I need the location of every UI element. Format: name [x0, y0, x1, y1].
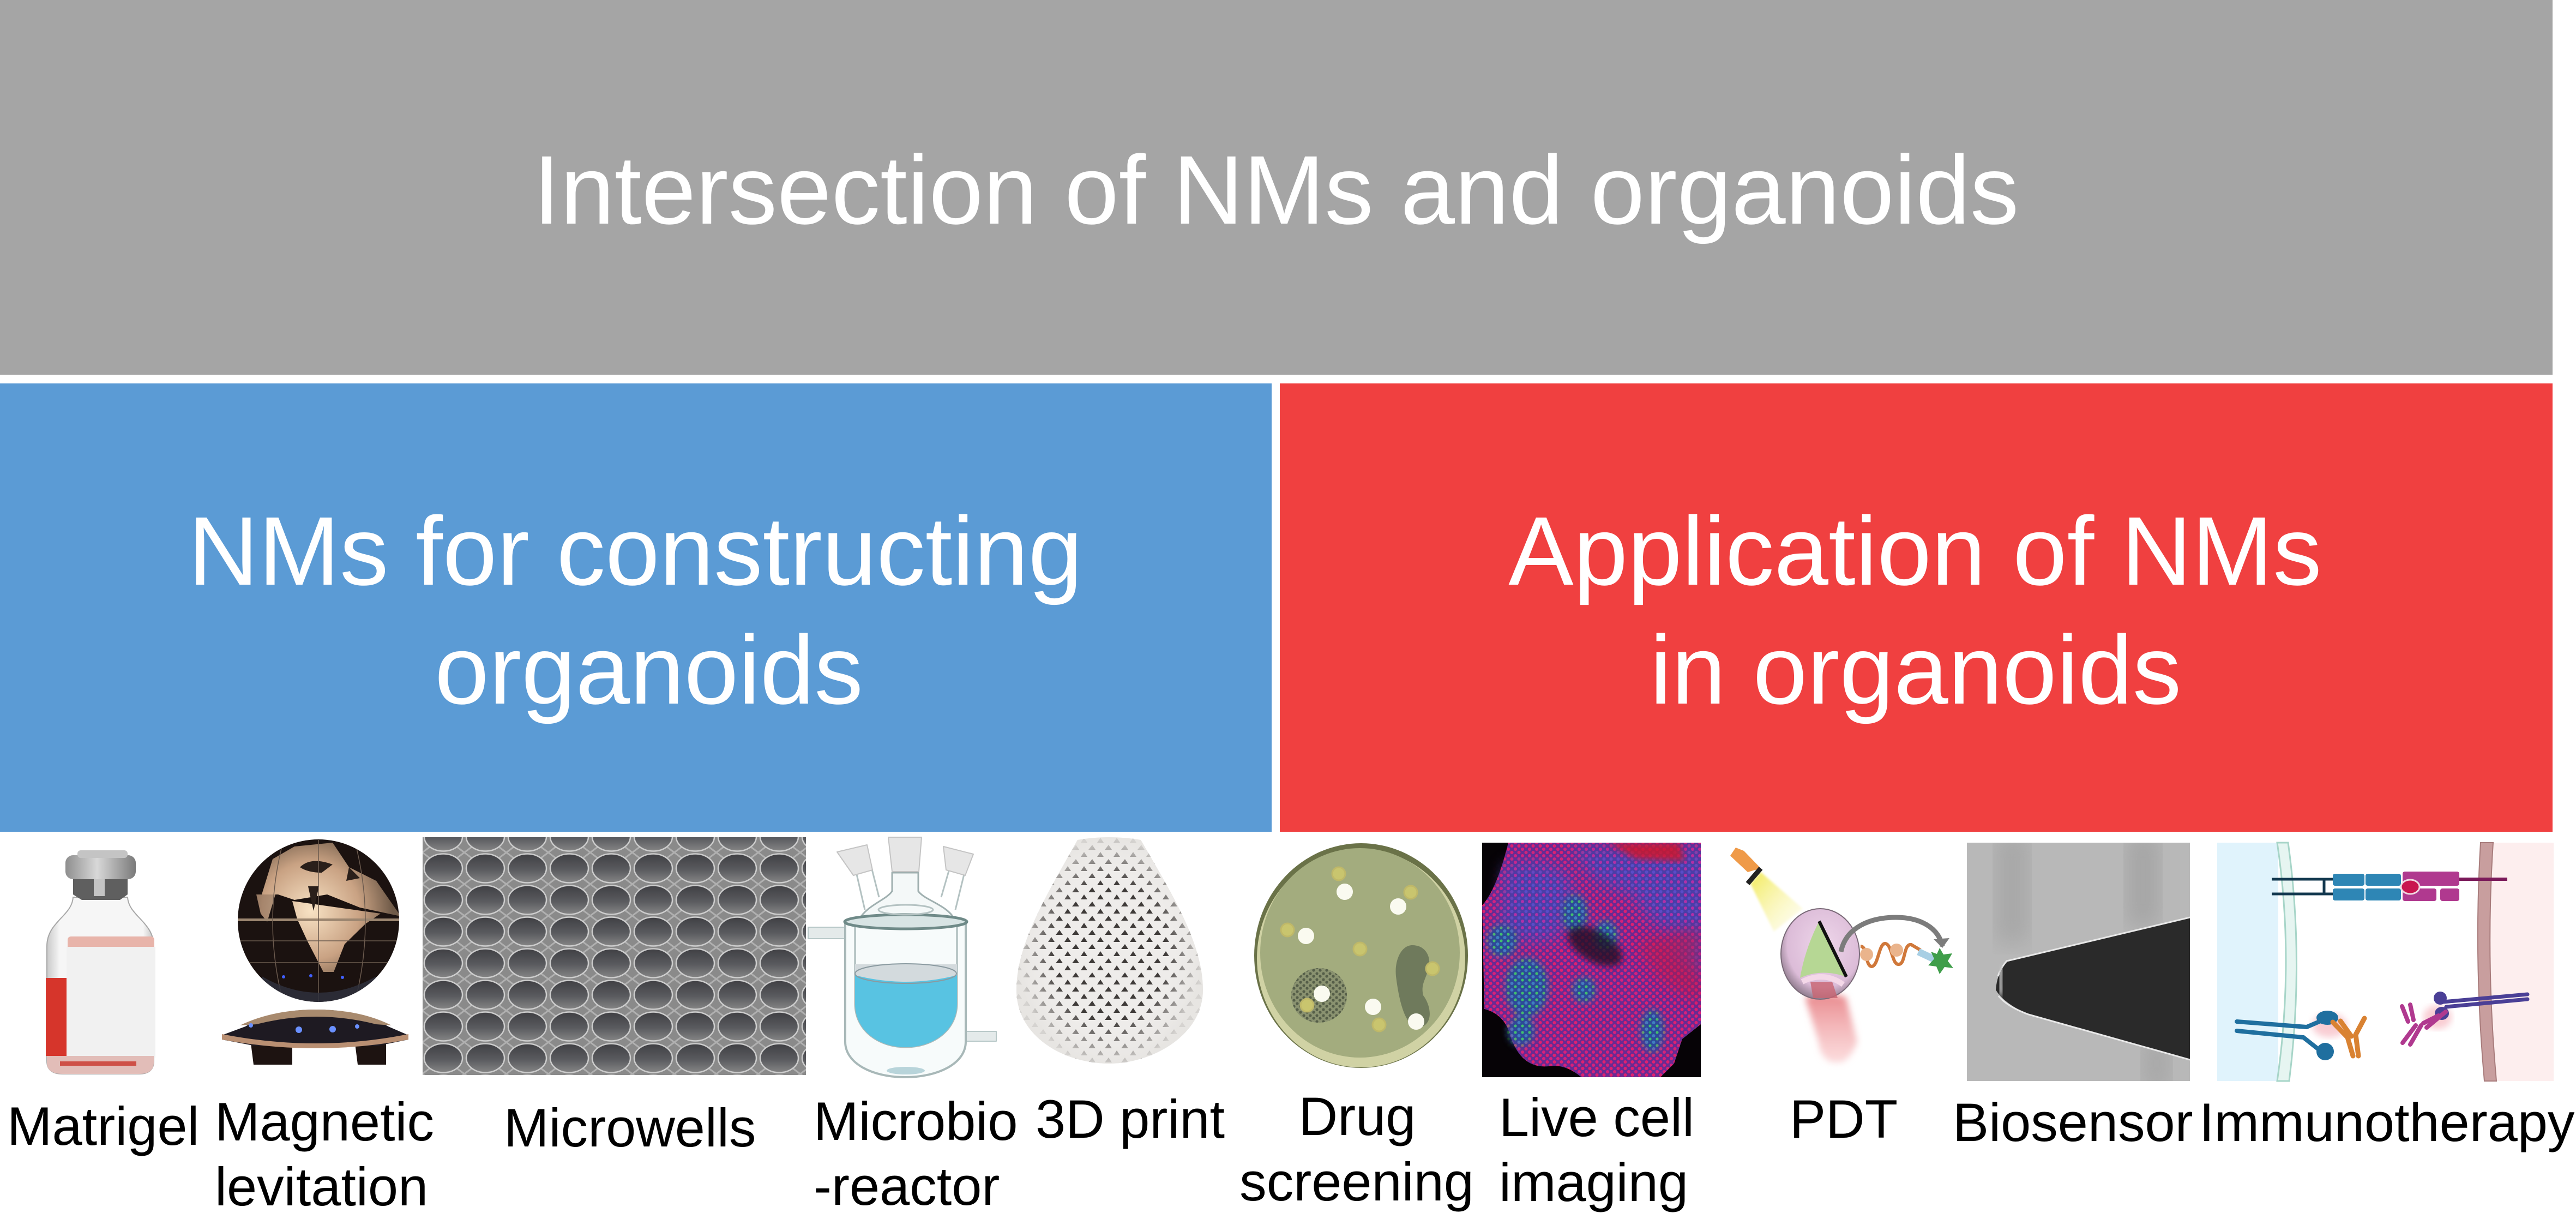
label: Microwells: Microwells	[504, 1098, 756, 1158]
molecule: T-cell receptor and MHC complex	[2272, 872, 2507, 901]
molecule: PD-L1 with antibody	[2402, 992, 2527, 1044]
heading: Intersection of NMs and organoids: Intersection of NMs and organoids	[533, 135, 2019, 244]
label: Immunotherapy: Immunotherapy	[2199, 1092, 2575, 1153]
label: Live cell imaging: Live cell	[1499, 1088, 1694, 1148]
panel: Application of NMs in organoids	[1280, 383, 2553, 832]
icon: photodynamic therapy nanoparticle	[1730, 848, 1953, 1062]
image: drug screening petri dish	[1254, 843, 1468, 1068]
heading: Application of NMs in organoids: in organoids	[1650, 615, 2181, 724]
panel: NMs for constructing organoids	[0, 383, 1272, 832]
label: Drug screening: screening	[1239, 1152, 1474, 1212]
label: Magnetic levitation: Magnetic	[215, 1092, 434, 1152]
icon: microbioreactor flask	[808, 837, 996, 1077]
heading: Application of NMs in organoids: Application of NMs	[1508, 496, 2322, 605]
label: Live cell imaging: imaging	[1499, 1152, 1688, 1213]
label: 3D print: 3D print	[1036, 1089, 1225, 1150]
heading: NMs for constructing organoids: organoids	[435, 615, 863, 724]
molecule: PD-1 with antibody	[2237, 1011, 2364, 1060]
image: live cell imaging micrograph	[1482, 843, 1701, 1077]
label: PDT: PDT	[1790, 1089, 1898, 1150]
icon: levitating globe	[222, 839, 408, 1065]
label: Biosensor: Biosensor	[1953, 1092, 2193, 1153]
icon: Matrigel vial	[46, 850, 155, 1074]
icon: immunotherapy checkpoint diagram	[2217, 843, 2554, 1081]
label: Drug screening: Drug	[1299, 1086, 1416, 1147]
heading: NMs for constructing organoids: NMs for constructing	[188, 496, 1082, 605]
image: biosensor tip micrograph	[1967, 834, 2190, 1091]
label: Microbio-reactor: Microbio	[814, 1091, 1018, 1152]
icon: 3D printed lattice vase	[1014, 834, 1205, 1066]
label: Matrigel: Matrigel	[7, 1096, 199, 1157]
image: microwell plate	[423, 837, 806, 1075]
